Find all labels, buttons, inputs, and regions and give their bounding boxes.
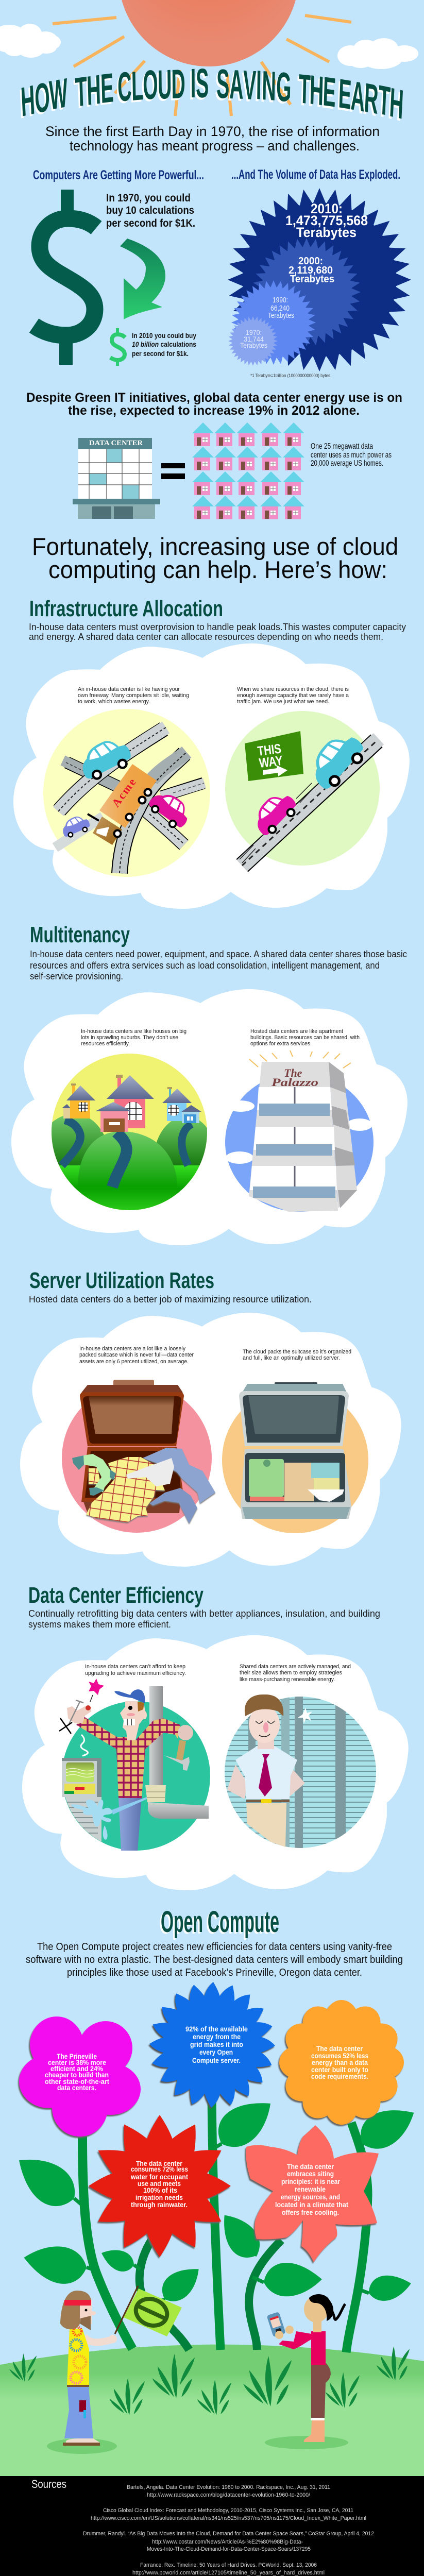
text: actively managed: Shared data centers are actively managed, and [240, 1664, 351, 1670]
icon: plaid shirt [86, 1457, 165, 1522]
text: multitenancy [30, 948, 407, 981]
flower: orange text [311, 2044, 368, 2080]
icon: blue house [162, 1087, 201, 1123]
flower: pink text: other state-of-the-art [45, 2077, 109, 2086]
icon: orange house [62, 1083, 95, 1118]
flower: coral text: The data center [287, 2162, 334, 2171]
text: infrastructure allocation [29, 621, 406, 642]
text: building sign: The [284, 1066, 302, 1079]
text: megawatt comparison: 20,000 average US homes. [311, 459, 383, 468]
text: source list: Cisco Global Cloud Index: Forecast and Methodology, 2010-2015, Cisco Systems Inc., San Jose, CA, 2011 [103, 2507, 353, 2514]
flower: pink text: The Prineville [57, 2052, 97, 2060]
flower: blue text [185, 2025, 248, 2064]
subtitle: technology has meant progress – and challenges. [70, 138, 360, 154]
flower: pink text [45, 2052, 109, 2092]
icon: repairman head [114, 1689, 147, 1740]
text: loose suitcase: In-house data centers are a lot like a loosely [79, 1346, 185, 1352]
icon: technician pants [246, 1803, 286, 1847]
flower: red text: use and meets [138, 2179, 181, 2188]
heading: computers: Computers Are Getting More Powerful... [33, 168, 204, 182]
grass tufts [9, 2346, 410, 2415]
illustration: suburb houses [52, 1054, 207, 1210]
burst: 2010 [220, 180, 419, 379]
heading: sources: Sources [31, 2478, 66, 2490]
heading: fortunately: Fortunately, increasing use of cloud [32, 533, 398, 560]
icon: data center building: DATA CENTER [89, 439, 143, 447]
illustration: tidy suitcase [222, 1382, 368, 1533]
text: multitenancy: self-service provisioning. [30, 971, 123, 981]
icon: folded shirt [249, 1459, 286, 1501]
icon: rooftop rays [249, 1050, 351, 1068]
text: infrastructure allocation: and energy. A shared data center can allocate resources depending on who needs them. [29, 631, 383, 642]
text: 2010 calculations: 10 billion calculations [132, 340, 196, 348]
icon: front pink house [95, 1102, 132, 1132]
label: 2010: 1,473,775,568 [285, 213, 368, 228]
icon: folded briefs [308, 1489, 344, 1502]
text: data center efficiency: systems makes them more efficient. [28, 1619, 171, 1630]
cloud: top left [0, 24, 61, 58]
label: 2000 [289, 256, 334, 285]
callout: energy use [26, 391, 402, 418]
flower: orange text: code requirements. [311, 2072, 368, 2080]
text: building sign [271, 1066, 318, 1089]
flower: red text: through rainwater. [131, 2200, 188, 2209]
text: open compute [26, 1941, 403, 1978]
flower: coral text: principles: it is near [281, 2177, 340, 2185]
heading: fortunately: computing can help. Here’s how: [48, 556, 387, 583]
flower: coral text: offers free cooling. [282, 2208, 339, 2216]
text: source list: Moves-Into-The-Cloud-Demand-for-Data-Center-Space-Soars/137295 [147, 2546, 311, 2552]
flower: blue [149, 1982, 275, 2108]
text: 1970 calculations: In 1970, you could [106, 192, 191, 204]
text: megawatt comparison: center uses as much power as [311, 451, 392, 460]
heading: server utilization: Server Utilization Rates [29, 1268, 214, 1293]
text: infrastructure allocation: In-house data centers must overprovision to handle peak loads.This wastes computer capacity [29, 621, 406, 632]
flower: red [89, 2115, 231, 2257]
leaf [263, 2261, 323, 2298]
icon: this way sign: WAY [258, 753, 283, 771]
heading: multitenancy: Multitenancy [30, 922, 130, 947]
text: in-house freeway: own freeway. Many computers sit idle, waiting [78, 692, 189, 699]
panel: multitenancy cloud [11, 989, 408, 1245]
title: HOWTHECLOUDISSAVINGTHEEARTH [20, 60, 404, 128]
text: in-house freeway [78, 686, 189, 705]
icon: technician arms [227, 1765, 305, 1799]
subtitle [45, 124, 380, 154]
text: source list: http://www.costar.com/News/Article/As-%E2%80%98Big-Data- [152, 2539, 303, 2545]
text: loose suitcase [79, 1346, 194, 1365]
label: 2010: Terabytes [296, 225, 357, 240]
text: actively managed: their size allows them to employ strategies [240, 1670, 342, 1676]
flower: coral text: embraces siting [287, 2170, 334, 2178]
icon: teal car [75, 734, 135, 784]
label: 1990: Terabytes [268, 311, 294, 320]
text: houses on big lots: resources efficiently. [81, 1041, 130, 1047]
icon: big teal car [302, 726, 371, 794]
flower: red text: The data center [136, 2159, 182, 2167]
flower: blue text: 92% of the available [185, 2025, 248, 2033]
icon: old server [65, 1797, 101, 1842]
icon: hurt hand with nail [59, 1700, 91, 1734]
icon: equals sign [161, 463, 185, 479]
flower: orange text: center built only to [311, 2065, 368, 2074]
text: houses on big lots [81, 1028, 186, 1047]
text: megawatt comparison [311, 442, 392, 468]
text: in-house freeway: An in-house data center is like having your [78, 686, 180, 692]
icon: overalls legs [118, 1797, 142, 1851]
illustration: open road [225, 711, 380, 866]
icon: this way sign [245, 731, 303, 781]
icon: folded socks [314, 1478, 340, 1489]
figure: hippie with flag [47, 2286, 182, 2454]
icon: water splash [71, 1797, 147, 1840]
icon: data center building [73, 438, 160, 519]
text: 1970 calculations [106, 192, 195, 229]
flower: pink text: data centers. [57, 2083, 96, 2092]
label: 1970: 1970: [246, 328, 262, 336]
icon: pain star [89, 1679, 104, 1695]
text: 2010 calculations: per second for $1k. [132, 349, 189, 358]
icon: Acme truck: Acme [109, 776, 139, 809]
flower: blue text: energy from the [193, 2032, 241, 2041]
sun rays [53, 15, 351, 116]
text: building sign: Palazzo [271, 1076, 318, 1089]
text: server utilization: Hosted data centers do a better job of maximizing resource utilization. [29, 1294, 312, 1304]
burst: 1990 [228, 277, 319, 368]
label: 2010 [285, 201, 368, 240]
text: open compute: software with no extra plastic. The best-designed data centers will embody smart building [26, 1954, 403, 1965]
burst: 2000 [248, 233, 365, 351]
illustration: calm technician [225, 1694, 376, 1850]
flower: coral [246, 2125, 379, 2262]
text: shared freeway: traffic jam. We use just what we need. [237, 699, 329, 705]
text: shared freeway: enough average capacity that we rarely have a [237, 692, 349, 699]
flower: coral text: located in a climate that [275, 2200, 348, 2209]
text: houses on big lots: lots in sprawling suburbs. They don’t use [81, 1035, 178, 1041]
icon: technician head [245, 1694, 283, 1749]
illustration: ground [0, 2345, 424, 2476]
icon: sock [72, 1454, 116, 1496]
icon: folded plaid [311, 1463, 340, 1478]
subtitle: Since the first Earth Day in 1970, the rise of information [45, 124, 380, 139]
text: organized suitcase [243, 1349, 351, 1361]
flower: blue text: grid makes it into [190, 2040, 243, 2048]
flower: orange text: energy than a data [312, 2058, 368, 2066]
illustration: messy suitcase [62, 1380, 215, 1533]
text: organized suitcase: The cloud packs the suitcase so it’s organized [243, 1349, 351, 1355]
icon: pink car [145, 786, 195, 833]
label: 2010: 2010: [311, 201, 343, 216]
label: 1970: 31,744 [244, 335, 264, 343]
flower: red text: irrigation needs [135, 2193, 183, 2201]
icon: monitor [62, 1735, 101, 1797]
icon: flag [115, 2286, 182, 2336]
text: apartment buildings: buildings. Basic resources can be shared, with [250, 1035, 360, 1041]
flower: orange text: The data center [316, 2044, 363, 2053]
callout: energy use: the rise, expected to increase 19% in 2012 alone. [68, 403, 360, 418]
label: 2000: Terabytes [290, 274, 334, 285]
text: can't afford upgrades [85, 1664, 186, 1676]
icon: necktie [259, 1754, 272, 1797]
heading: data center efficiency: Data Center Efficiency [28, 1583, 203, 1608]
text: source list [78, 2484, 380, 2576]
text: organized suitcase: and full, like an optimally utilized server. [243, 1355, 340, 1361]
flower: red text: consumes 72% less [131, 2165, 188, 2173]
illustration: apartment building [225, 1050, 374, 1212]
flower: blue text: Compute server. [192, 2056, 241, 2064]
text: 1970 calculations: per second for $1K. [106, 217, 195, 229]
label: 2000: 2000: [298, 256, 323, 267]
text: source list: Bartels, Angela. Data Center Evolution: 1960 to 2000. Rackspace, Inc., Aug. 31, 2011 [127, 2484, 330, 2490]
text: multitenancy: resources and offers extra services such as load consolidation, intelligent management, and [30, 960, 380, 971]
panel: utilization cloud [20, 1313, 401, 1567]
cloud: top right [337, 38, 418, 69]
text: can't afford upgrades: In-house data centers can’t afford to keep [85, 1664, 185, 1670]
leaf [212, 2207, 267, 2265]
icon: white briefs [126, 1458, 174, 1486]
title: HOWTHECLOUDISSAVINGTHEEARTH [18, 62, 403, 130]
text: can't afford upgrades: upgrading to achieve maximum efficiency. [85, 1670, 186, 1676]
flower: pink text: center is 38% more [48, 2058, 106, 2066]
icon: big pink car [248, 787, 302, 840]
icon: small dollar sign [110, 328, 125, 366]
text: 2010 calculations [132, 331, 196, 358]
icon: blue jeans [143, 1448, 215, 1523]
starburst chart: data volume [220, 180, 419, 379]
text: shared freeway [237, 686, 349, 705]
leaf [7, 2146, 84, 2216]
text: source list: http://www.rackspace.com/blog/datacenter-evolution-1960-to-2000/ [147, 2492, 311, 2498]
illustration: frustrated repairman [59, 1679, 210, 1851]
heading: open compute [159, 1905, 279, 1940]
text: apartment buildings: options for extra services. [250, 1041, 312, 1047]
figure: woman with phone [265, 2294, 348, 2449]
icon: phone [266, 2312, 286, 2337]
icons: grid of houses [192, 422, 304, 519]
leaf [209, 2088, 281, 2157]
icon: plaid shirt [76, 1717, 180, 1798]
footnote: *1 Terabyte=1trillion (1000000000000) bytes [250, 373, 330, 378]
flower: red text: water for occupant [130, 2173, 188, 2181]
icon: purple car [59, 813, 92, 840]
icon: folded pants [284, 1463, 314, 1501]
flower: pink text: cheaper to build than [45, 2071, 109, 2079]
leaf [352, 2096, 422, 2157]
text: apartment buildings: Hosted data centers are like apartment [250, 1028, 343, 1035]
icon: main pink house [107, 1075, 154, 1128]
callout: energy use: Despite Green IT initiatives, global data center energy use is on [26, 391, 402, 405]
leaf [366, 2270, 414, 2304]
text: loose suitcase: packed suitcase which is never full—data center [79, 1352, 194, 1358]
text: apartment buildings [250, 1028, 360, 1047]
flower: orange [279, 2000, 404, 2125]
burst: 1970 [226, 314, 280, 368]
flower: pink text: efficient and 24% [50, 2064, 103, 2073]
flower: red text: 100% of its [143, 2186, 177, 2194]
text: source list: Drummer, Randyl. “As Big Data Moves Into the Cloud, Demand for Data Center Space Soars,” CoStar Group, April 4, 2012 [83, 2531, 374, 2537]
text: data center efficiency: Continually retrofitting big data centers with better appliances, insulation, and building [28, 1608, 380, 1619]
label: 1970 [240, 328, 267, 349]
panel: sources footer [0, 2476, 424, 2576]
text: in-house freeway: to work, which wastes energy. [78, 699, 150, 705]
leaf [21, 2241, 89, 2287]
text: open compute: The Open Compute project creates new efficiencies for data centers using vanity-free [37, 1941, 392, 1953]
text: loose suitcase: assets are only 6 percent utilized, on average. [79, 1359, 189, 1365]
label: 1990: 1990: [273, 296, 288, 304]
panel: efficiency cloud [22, 1635, 409, 1890]
flower: red text [130, 2159, 188, 2209]
flower: coral text [275, 2162, 348, 2216]
text: data center efficiency [28, 1608, 380, 1630]
text: actively managed [240, 1664, 351, 1683]
label: 1970: Terabytes [240, 341, 267, 349]
text: megawatt comparison: One 25 megawatt data [311, 442, 373, 451]
label: 1990: 66,240 [270, 304, 290, 313]
text: open compute: principles like those used at Facebook’s Prineville, Oregon data center. [67, 1967, 362, 1978]
icon: big dollar sign [34, 190, 96, 365]
flower: coral text: energy sources, and [281, 2193, 340, 2201]
text: source list: http://www.pcworld.com/article/127105/timeline_50_years_of_hard_drives.html [132, 2570, 325, 2576]
text: 2010 calculations: In 2010 you could buy [132, 331, 196, 340]
flower: blue text: every Open [199, 2048, 233, 2056]
heading: fortunately [32, 533, 398, 583]
heading: open compute: Open Compute [161, 1905, 279, 1939]
text: source list: http://www.cisco.com/en/US/solutions/collateral/ns341/ns525/ns537/ns705/ns1175/Cloud_Index_White_Paper.html [91, 2515, 366, 2521]
leaf [98, 2245, 137, 2275]
illustration: traffic jam [43, 709, 210, 877]
icon: Acme truck [88, 764, 157, 845]
icon: this way sign: THIS [257, 741, 282, 759]
icon: hammer [164, 1725, 193, 1771]
heading: open compute: Open Compute [159, 1907, 278, 1940]
text: shared freeway: When we share resources in the cloud, there is [237, 686, 349, 692]
text: houses on big lots: In-house data centers are like houses on big [81, 1028, 186, 1035]
text: actively managed: like mass-purchasing renewable energy. [240, 1676, 335, 1683]
label: 1990 [268, 296, 294, 320]
flower: pink [19, 2016, 141, 2137]
label: 2000: 2,119,680 [289, 265, 333, 276]
icon: leaking pipe [145, 1686, 209, 1819]
text: 1970 calculations: buy 10 calculations [106, 205, 194, 216]
sun [118, 0, 299, 66]
arrow: down [120, 239, 165, 319]
heading: infrastructure allocation: Infrastructure Allocation [29, 596, 223, 621]
icon: technician shirt [235, 1746, 297, 1799]
flower: coral text: renewable [295, 2185, 326, 2193]
text: source list: Farrance, Rex. Timeline: 50 Years of Hard Drives. PCWorld, Sept. 13, 2006 [140, 2562, 317, 2568]
icon: spark [298, 1708, 312, 1723]
flower: orange text: consumes 52% less [311, 2052, 368, 2060]
leaf [155, 2259, 207, 2308]
panel: infrastructure cloud [13, 643, 410, 909]
flower stems and leaves [7, 2081, 422, 2352]
